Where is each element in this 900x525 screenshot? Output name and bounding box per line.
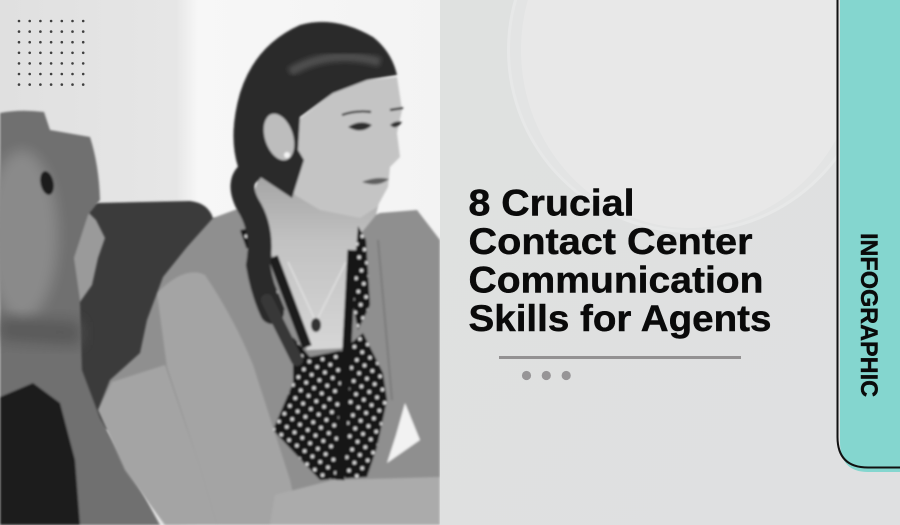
button placket: [378, 240, 392, 400]
title: Contact Center: [468, 221, 752, 262]
vertical label: INFOGRAPHIC: INFOGRAPHIC: [855, 233, 882, 397]
three pagination dots: [522, 371, 571, 380]
main agent woman: [98, 22, 440, 525]
teal fill: [840, 0, 900, 472]
mouth: [362, 178, 389, 184]
panel: photo of contact center agents: [0, 0, 440, 525]
outer ring: [507, 0, 873, 233]
neck and chest: [254, 178, 379, 352]
lanyard straps: [273, 257, 307, 347]
lower cardigan hem at left: [98, 365, 217, 525]
headscarf shadow band: [0, 318, 80, 345]
title: Communication: [468, 260, 764, 300]
polka dot top: [273, 333, 387, 480]
decorative dot grid: [18, 20, 85, 86]
dark shirt: [0, 383, 80, 525]
photo background wall: [178, 0, 440, 525]
hair: [233, 22, 397, 198]
headscarf pin: [39, 170, 55, 196]
ear: [262, 112, 296, 162]
black outline: [838, 0, 900, 468]
title: 8 Crucial: [468, 182, 634, 224]
panel: grey title background: [440, 0, 900, 525]
title: Skills for Agents: [468, 298, 772, 339]
divider rule: [499, 356, 741, 359]
headscarf highlight: [0, 150, 58, 320]
gap under arm: [387, 403, 420, 463]
left sleeve: [157, 272, 300, 525]
hair shine: [290, 57, 380, 72]
earring: [284, 152, 290, 158]
necklace: [288, 262, 346, 322]
headscarf: [0, 111, 160, 525]
background circle decoration: [521, 0, 836, 228]
dark chair: [78, 199, 215, 430]
title: [468, 182, 772, 339]
teal side tab: [838, 0, 900, 472]
lower forearm: [292, 476, 440, 525]
cardigan: [99, 208, 440, 492]
eyebrows and eyes: [342, 108, 403, 115]
braid: [242, 172, 272, 312]
face: [280, 77, 402, 218]
face profile: [68, 212, 105, 302]
inner disc: [521, 0, 859, 228]
agent in headscarf, foreground left: [0, 111, 160, 525]
